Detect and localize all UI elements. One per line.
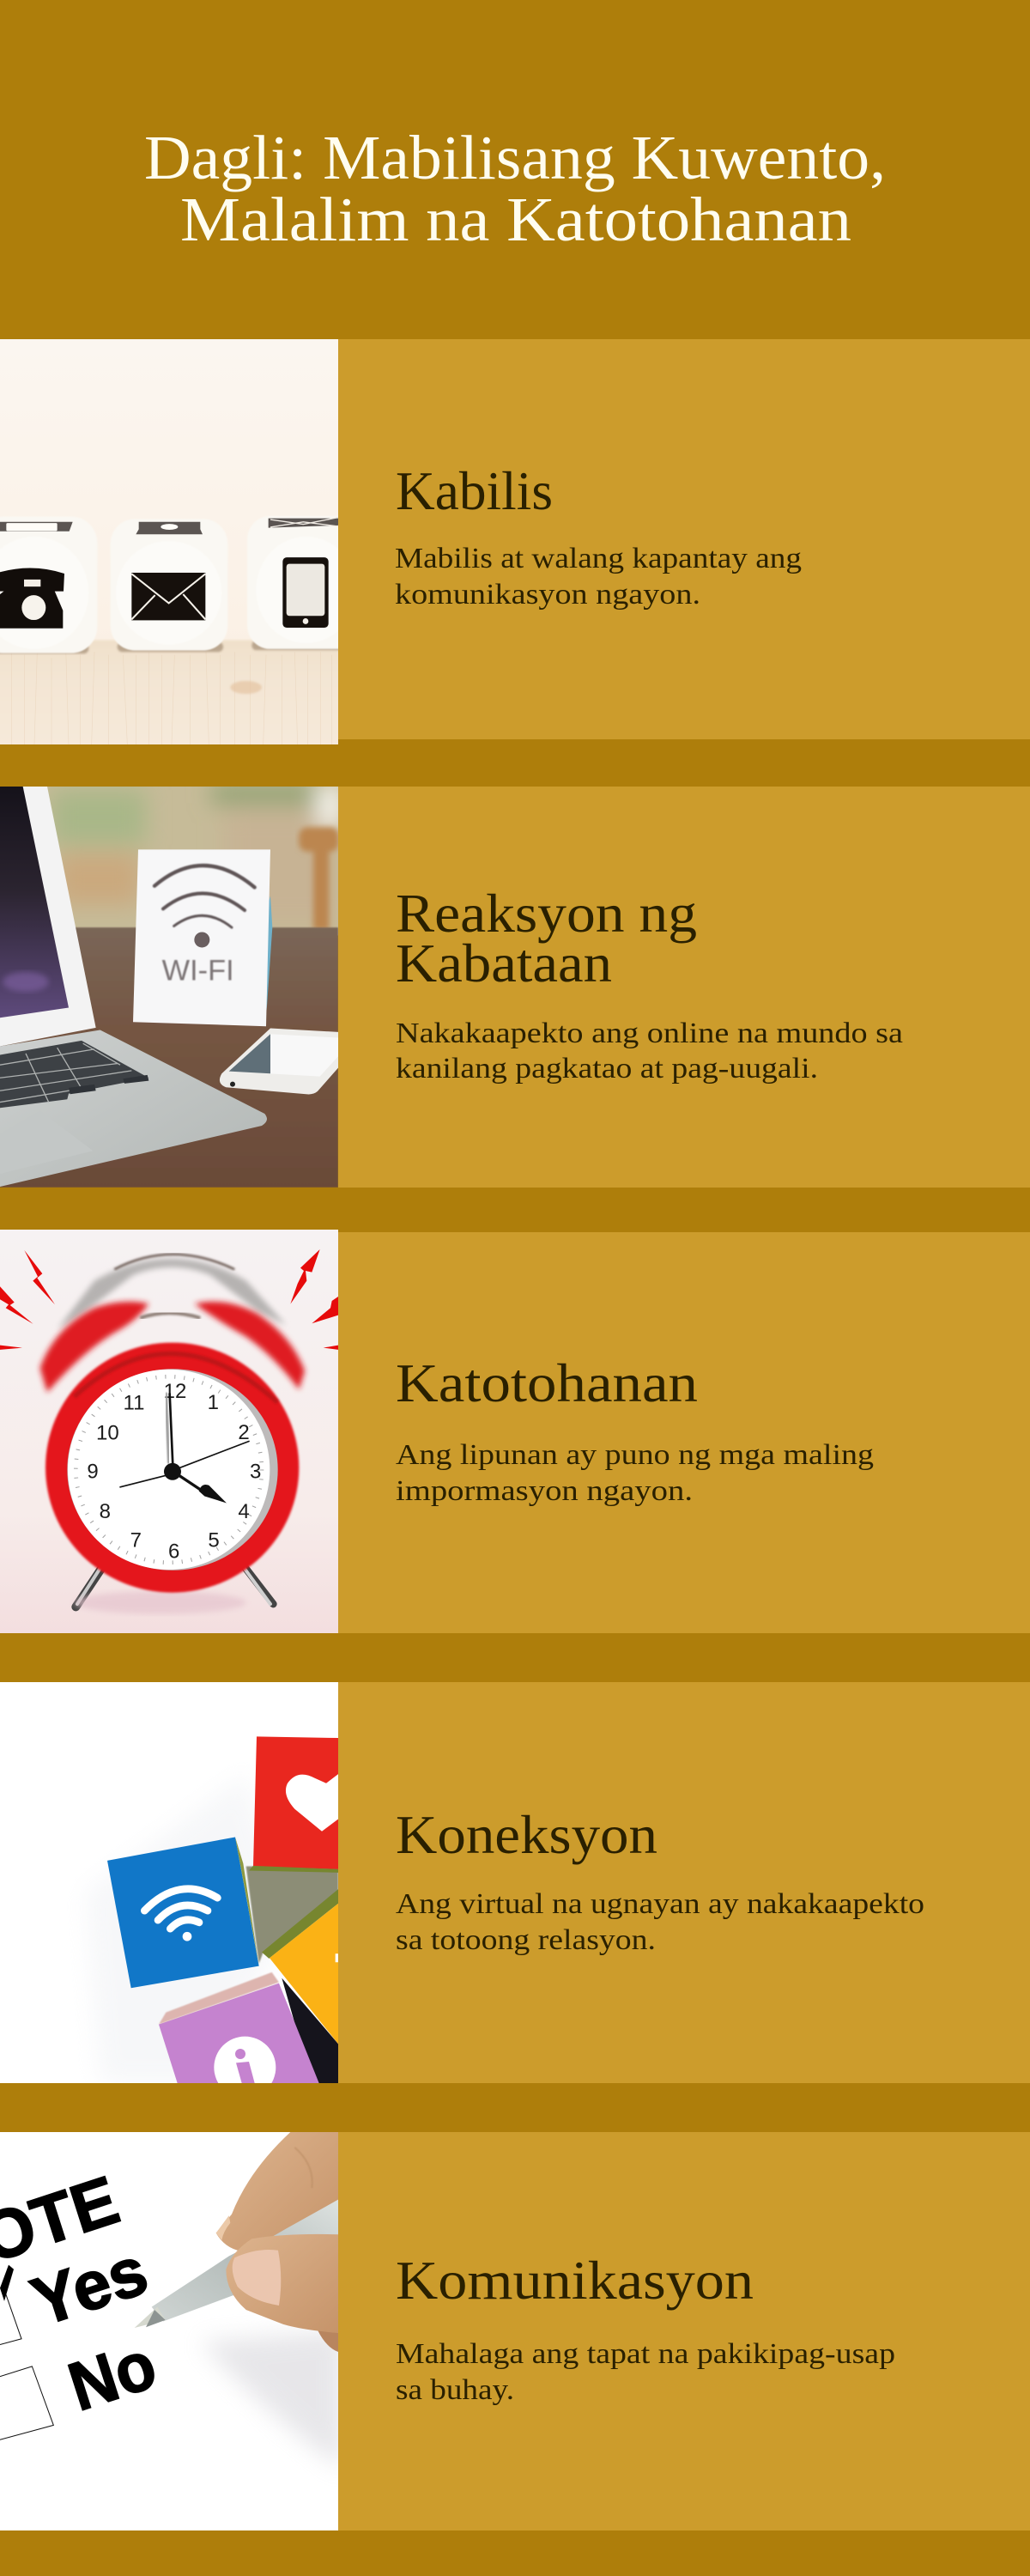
panel: Kabilis [0,339,1030,758]
clock numerals: 12 [164,1380,186,1403]
clock numerals: 7 [130,1528,142,1552]
title [144,123,886,254]
clock numerals: 6 [168,1540,179,1564]
text panel background [338,2132,1030,2530]
heart [286,1774,338,1832]
clock numerals: 10 [96,1422,119,1444]
body text: Ang lipunan ay puno ng mga maling [396,1439,874,1471]
clock body [45,1343,299,1593]
title: Dagli: Mabilisang Kuwento, [144,123,886,192]
photo: ringing red alarm clock [0,1230,338,1633]
clock numerals [87,1380,261,1564]
blue wi-fi cube [107,1837,259,1988]
olive cube side [246,1866,338,1964]
clock numerals: 1 [208,1391,219,1414]
body text: Nakakaapekto ang online na mundo sa [396,1018,903,1049]
body text: kanilang pagkatao at pag-uugali. [396,1053,818,1084]
clock numerals: 2 [238,1421,250,1444]
fingers [216,2132,338,2251]
body text: impormasyon ngayon. [396,1475,693,1507]
legs [76,1567,273,1607]
die 3 [247,516,365,649]
heading: Reaksyon ng [396,883,697,944]
body text: sa totoong relasyon. [396,1924,656,1956]
clock numerals: 8 [100,1500,111,1523]
panel: Koneksyon [0,1682,1030,2099]
black cube shadow [282,1978,338,2083]
handle and hammers [58,1259,286,1329]
lightning bolts [0,1249,338,1350]
heading [396,883,697,993]
clock numerals: 4 [238,1500,250,1523]
check boxes and tick [0,2293,53,2439]
laptop lid [0,787,96,1047]
body text: Mahalaga ang tapat na pakikipag-usap [396,2338,895,2370]
photo: hand with pen over a vote form [0,2132,338,2530]
clock hands [120,1394,249,1490]
photo: laptop, wi-fi sign and phone: WI-FI [162,954,234,987]
clock numerals: 5 [208,1528,220,1552]
body text: Ang virtual na ugnayan ay nakakaapekto [396,1888,924,1920]
phone [220,1029,338,1094]
heading: Katotohanan [396,1352,698,1413]
panel: Reaksyon ng Kabataan [0,784,1030,1188]
body text [396,2338,895,2406]
vote form lettering [0,2160,165,2425]
heading: Kabataan [396,933,612,993]
text panel background [338,1232,1030,1633]
heading: Komunikasyon [396,2250,754,2311]
clock numerals: 3 [250,1460,261,1483]
chair [299,827,339,930]
die 2 [111,519,227,651]
panel: Komunikasyon [0,2132,1030,2530]
body text [396,1018,903,1084]
red cube [253,1736,338,1869]
vote form lettering: No [60,2325,165,2425]
heading: Koneksyon [396,1804,657,1865]
laptop base [0,1030,267,1187]
heading: Kabilis [396,460,553,521]
body text [395,543,802,611]
body text: komunikasyon ngayon. [395,579,700,611]
clock numerals: 11 [124,1392,144,1415]
body text: sa buhay. [396,2374,514,2406]
body text: Mabilis at walang kapantay ang [395,543,802,574]
clock numerals: 9 [87,1460,99,1483]
photo: laptop, wi-fi sign and phone [0,787,338,1188]
text panel background [338,787,1030,1188]
pen [152,2200,338,2322]
title: Malalim na Katotohanan [180,185,851,254]
text panel background [338,339,1030,739]
photo: colourful social icon cubes [0,1682,338,2083]
purple info cube [159,1972,279,2025]
text panel background [338,1682,1030,2083]
body text [396,1439,874,1507]
die 1 [0,517,97,653]
vote form lettering: Yes [22,2231,156,2341]
body text [396,1888,924,1956]
die shadows [0,641,343,653]
photo: three dice with communication icons [0,339,338,744]
keyboard [0,1041,148,1108]
yellow cube [270,1904,338,2044]
panel: Katotohanan [0,1230,1030,1633]
wi-fi sign [264,896,272,1011]
